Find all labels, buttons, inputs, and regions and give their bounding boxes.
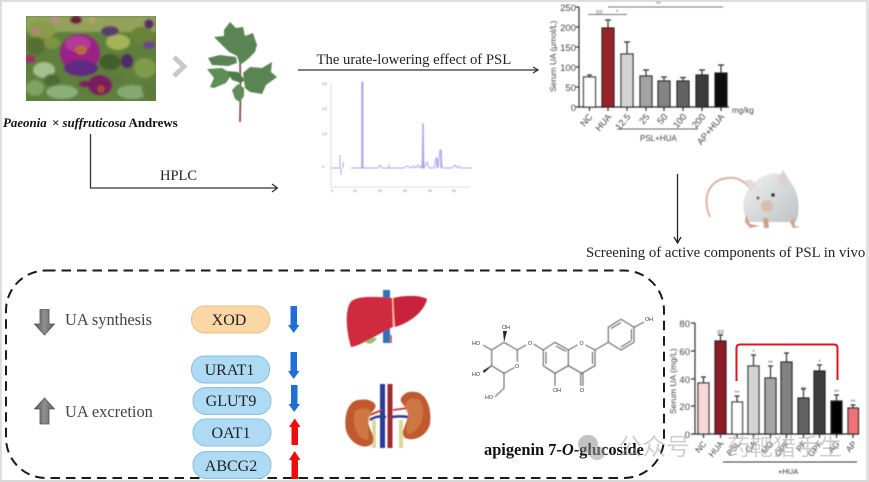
bar chart: serum UA by PSL dose: 200 (690, 112, 708, 130)
structure: apigenin 7-O-glucoside: O (515, 364, 519, 370)
bar chart: serum UA by fraction: GPF (806, 439, 825, 459)
bar chart: serum UA by fraction: 80 (679, 319, 690, 330)
label: urate-lowering effect: The urate-lowering effect of PSL (316, 52, 511, 68)
pill: ABCG2 (193, 452, 271, 478)
structure: apigenin 7-O-glucoside: OH (645, 317, 653, 323)
bar chart: serum UA by fraction: PSL (725, 439, 743, 458)
bar chart: serum UA by PSL dose: 150 (560, 43, 576, 54)
bar chart: serum UA by fraction: 20 (679, 402, 690, 413)
icon: blue down arrow XOD (288, 306, 300, 333)
bar chart: serum UA by PSL dose: mg/kg (732, 106, 754, 115)
chart: HPLC chromatogram: 40 (428, 189, 432, 193)
chart: HPLC chromatogram: 20 (378, 189, 382, 193)
pill: XOD: XOD (212, 312, 246, 329)
bar chart: serum UA by fraction: Serum UA (mg/L) (668, 348, 678, 414)
structure: apigenin 7-O-glucoside: O (580, 341, 584, 347)
pill: ABCG2: ABCG2 (205, 458, 257, 475)
label: apigenin: apigenin 7-O-glucoside (484, 440, 644, 459)
bar chart: serum UA by fraction: ** (851, 400, 856, 406)
bar chart: serum UA by PSL dose: 25 (637, 112, 652, 126)
arrow: to in vivo screening (674, 174, 681, 243)
icon: kidneys (345, 384, 430, 448)
bar chart: serum UA by PSL dose: Serum UA (μmol/L) (548, 20, 558, 92)
label: screening: Screening of active components of PSL in vivo (586, 245, 865, 261)
pill: URAT1: URAT1 (205, 362, 254, 379)
bar chart: serum UA by fraction: NC (693, 439, 709, 455)
bar chart: serum UA by fraction: +HUA (778, 467, 798, 476)
bar chart: serum UA by PSL dose: NC (578, 112, 595, 128)
icon: red up arrow OAT1 (289, 418, 300, 445)
chart: HPLC chromatogram: 50 (452, 189, 456, 193)
bar chart: serum UA by PSL dose: AP+HUA (695, 111, 727, 147)
bar chart: serum UA by PSL dose: 0 (571, 103, 576, 114)
icon: up grey arrow (34, 398, 54, 424)
panel: mechanism (dashed) (6, 270, 664, 479)
bar chart: serum UA by fraction: AG (826, 439, 842, 455)
bar chart: serum UA by fraction: 60 (679, 347, 690, 358)
bar chart: serum UA by PSL dose: HUA (593, 111, 614, 133)
bar chart: serum UA by PSL dose: 100 (560, 63, 576, 74)
bar chart: serum UA by PSL dose: 50 (655, 112, 670, 126)
icon: grey chevron (174, 57, 184, 76)
chart: HPLC chromatogram: 0 (331, 189, 333, 193)
pill: OAT1 (193, 419, 271, 446)
bar chart: serum UA by PSL dose: PSL+HUA (640, 134, 677, 143)
pill: OAT1: OAT1 (211, 425, 251, 442)
pill: GLUT9 (193, 388, 271, 414)
structure: apigenin 7-O-glucoside (472, 317, 653, 401)
pill: XOD (192, 306, 270, 333)
icon: blue down arrow GLUT9 (288, 385, 300, 412)
bar chart: serum UA by PSL dose: 100 (671, 112, 689, 130)
chart: HPLC chromatogram: 10 (353, 189, 357, 193)
bar chart: serum UA by fraction: MG (759, 439, 776, 456)
bar chart: serum UA by fraction: 0 (685, 430, 690, 441)
species label: Paeonia × suffruticosa Andrews (3, 116, 178, 130)
icon: down grey arrow (34, 310, 54, 335)
bar chart: serum UA by PSL dose: ** (656, 2, 661, 8)
bar chart: serum UA by PSL dose: 250 (560, 3, 576, 14)
icon: peony leaf (207, 22, 277, 122)
icon: red up arrow ABCG2 (289, 451, 300, 479)
structure: apigenin 7-O-glucoside: OH (502, 325, 510, 331)
bar chart: serum UA by fraction: * (818, 360, 821, 366)
chart: HPLC chromatogram: 3.5 (322, 82, 327, 86)
bar chart: serum UA by fraction: ** (768, 361, 773, 367)
bar chart: serum UA by fraction: 40 (679, 375, 690, 386)
label: UA excretion: UA excretion (65, 402, 153, 421)
chart: HPLC chromatogram (322, 82, 472, 193)
watermark (578, 427, 842, 462)
bar chart: serum UA by fraction: ## (717, 330, 724, 336)
bracket: red (736, 344, 838, 381)
chart: HPLC chromatogram: 30 (403, 189, 407, 193)
bar chart: serum UA by fraction (668, 319, 859, 476)
bar chart: serum UA by fraction: ** (801, 387, 806, 393)
chart: HPLC chromatogram: 2.5 (322, 107, 327, 111)
photo: Paeonia flowers (25, 16, 158, 101)
bar chart: serum UA by fraction: * (752, 350, 755, 356)
icon: liver (347, 290, 427, 347)
label: UA synthesis: UA synthesis (65, 310, 152, 329)
pill: GLUT9: GLUT9 (206, 393, 256, 410)
watermark: 药靶猎手生 (727, 428, 842, 462)
bar chart: serum UA by fraction: ** (735, 391, 740, 397)
structure: apigenin 7-O-glucoside: O (580, 388, 584, 394)
bar chart: serum UA by PSL dose (548, 2, 754, 147)
structure: apigenin 7-O-glucoside: HO (485, 395, 493, 401)
bar chart: serum UA by fraction: ** (834, 390, 839, 396)
chart: HPLC chromatogram: 0 (322, 165, 324, 169)
pill: URAT1 (192, 356, 270, 383)
bar chart: serum UA by PSL dose: 12.5 (613, 112, 633, 132)
bar chart: serum UA by fraction: GA (743, 439, 759, 455)
bar chart: serum UA by fraction: HUA (706, 439, 726, 459)
arrow: urate-lowering (298, 67, 538, 73)
label: HPLC: HPLC (160, 168, 197, 184)
structure: apigenin 7-O-glucoside: HO (472, 372, 480, 378)
bar chart: serum UA by fraction: PF (794, 439, 809, 454)
chart: HPLC chromatogram: 1.5 (322, 132, 327, 136)
structure: apigenin 7-O-glucoside: OH (553, 388, 561, 394)
bar chart: serum UA by fraction: AP (844, 439, 859, 454)
bar chart: serum UA by PSL dose: 50 (565, 83, 576, 94)
bar chart: serum UA by PSL dose: 200 (560, 23, 576, 34)
structure: apigenin 7-O-glucoside: O (528, 341, 532, 347)
watermark: 公众号 (618, 427, 690, 462)
icon: white mouse (707, 170, 801, 228)
bar chart: serum UA by fraction: OPF (773, 439, 792, 459)
bar chart: serum UA by PSL dose: ## (596, 10, 603, 16)
structure: apigenin 7-O-glucoside: HO (472, 341, 480, 347)
arrow: plant to HPLC (90, 134, 278, 192)
bar chart: serum UA by PSL dose: * (616, 10, 619, 16)
icon: blue down arrow URAT1 (288, 352, 300, 379)
